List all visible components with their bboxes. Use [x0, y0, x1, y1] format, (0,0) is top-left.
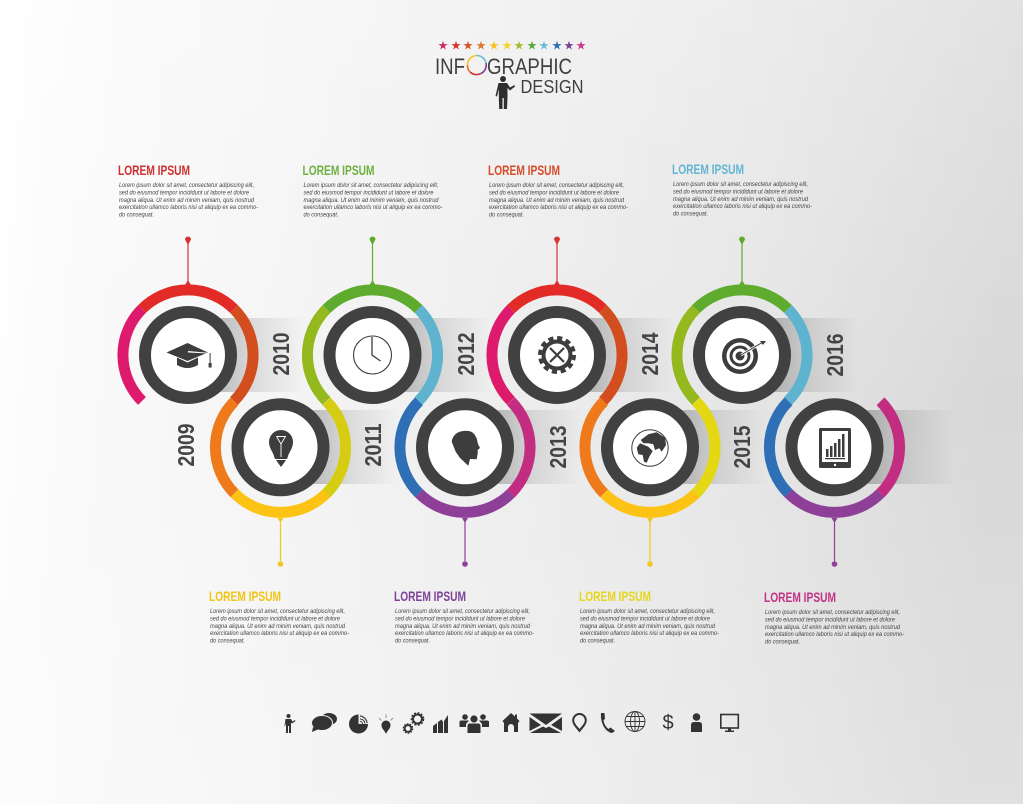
icon: people group — [460, 714, 489, 733]
text block 2: LOREM IPSUM — [302, 162, 374, 178]
text block 7: Lorem ipsum dolor sit amet, consectetur adipiscing elit, — [580, 608, 715, 615]
text block 1 — [118, 162, 258, 218]
rainbow star row: ★ — [502, 38, 512, 52]
text block 6: LOREM IPSUM — [394, 588, 466, 604]
text block 5: sed do eiusmod tempor incididunt ut labore et dolore — [210, 616, 340, 622]
node: graduation cap — [145, 312, 231, 398]
text block 4: LOREM IPSUM — [672, 161, 744, 177]
icon: glowing bulb — [379, 714, 393, 734]
icon: head profile — [452, 431, 480, 466]
text block 7 — [579, 588, 719, 644]
text block 3: sed do eiusmod tempor incididunt ut labore et dolore — [489, 190, 619, 196]
text block 6: exercitation ullamco laboris nisi ut aliquip ex ea commo- — [395, 630, 534, 637]
icon: pie radar — [349, 714, 368, 734]
node: gear — [514, 312, 600, 398]
icon: user — [691, 713, 702, 732]
node: tablet chart — [792, 404, 878, 490]
icon: globe — [625, 712, 645, 732]
shadow bands — [215, 318, 957, 484]
text block 3 — [488, 162, 628, 218]
text block 1: do consequat. — [119, 212, 154, 218]
text block 2: do consequat. — [304, 212, 338, 218]
icon: envelope — [530, 714, 562, 733]
node: light bulb — [238, 404, 324, 490]
text block 8: sed do eiusmod tempor incididunt ut labore et dolore — [765, 616, 895, 624]
icon: gear — [540, 338, 574, 372]
year 2012: 2012 — [453, 332, 479, 376]
icon: monitor — [721, 714, 738, 732]
text block 3: magna aliqua. Ut enim ad minim veniam, quis nostrud — [489, 197, 624, 204]
icon: presenter — [496, 76, 515, 109]
year 2009: 2009 — [173, 424, 199, 466]
rainbow star row: ★ — [514, 38, 524, 52]
icon: light bulb — [269, 430, 293, 467]
year 2011: 2011 — [360, 423, 386, 466]
pin 2 — [370, 236, 376, 285]
icon: speech bubbles — [312, 713, 337, 732]
rainbow star row — [438, 38, 586, 52]
bottom icon row — [284, 712, 738, 734]
rainbow star row: ★ — [564, 38, 574, 52]
rainbow star row: ★ — [576, 38, 586, 52]
rainbow star row: ★ — [552, 38, 562, 52]
text block 5: magna aliqua. Ut enim ad minim veniam, quis nostrud — [210, 623, 345, 630]
text block 2: sed do eiusmod tempor incididunt ut labore et dolore — [304, 190, 434, 196]
text block 8: Lorem ipsum dolor sit amet, consectetur adipiscing elit, — [765, 609, 900, 616]
year 2013: 2013 — [545, 426, 571, 468]
text block 1: LOREM IPSUM — [118, 162, 190, 178]
pin 6 — [462, 518, 468, 567]
text block 6: magna aliqua. Ut enim ad minim veniam, quis nostrud — [395, 623, 530, 630]
node: clock — [330, 312, 416, 398]
text block 1: exercitation ullamco laboris nisi ut aliquip ex ea commo- — [119, 204, 258, 211]
ribbon timeline — [123, 290, 900, 512]
icon: target — [722, 338, 766, 374]
node: head — [422, 404, 508, 490]
text block 6: do consequat. — [395, 638, 430, 644]
year 2014: 2014 — [637, 332, 663, 376]
text block 8: do consequat. — [765, 638, 800, 646]
pin 3 — [554, 236, 560, 285]
pin 4 — [739, 236, 745, 285]
icon: map pin — [572, 713, 587, 732]
text block 7: do consequat. — [580, 638, 615, 644]
text block 2 — [302, 162, 442, 218]
text block 6: Lorem ipsum dolor sit amet, consectetur adipiscing elit, — [395, 608, 530, 615]
segment upper loop 4 — [677, 290, 807, 401]
text block 2: Lorem ipsum dolor sit amet, consectetur adipiscing elit, — [304, 182, 439, 189]
rainbow star row: ★ — [476, 38, 486, 52]
text block 3: exercitation ullamco laboris nisi ut aliquip ex ea commo- — [489, 204, 628, 211]
text block 8: exercitation ullamco laboris nisi ut aliquip ex ea commo- — [765, 631, 904, 638]
text block 5 — [209, 588, 349, 644]
text block 7: exercitation ullamco laboris nisi ut aliquip ex ea commo- — [580, 630, 719, 637]
text block 4: Lorem ipsum dolor sit amet, consectetur adipiscing elit, — [673, 181, 808, 188]
pin 1 — [185, 236, 191, 285]
node: target — [699, 312, 785, 398]
title ring letter O — [467, 55, 486, 75]
text block 3: Lorem ipsum dolor sit amet, consectetur adipiscing elit, — [489, 182, 624, 189]
text block 4: exercitation ullamco laboris nisi ut aliquip ex ea commo- — [673, 203, 812, 210]
segment 2009-2010 top loop — [123, 290, 253, 401]
text block 1: sed do eiusmod tempor incididunt ut labore et dolore — [119, 190, 249, 196]
text block 5: LOREM IPSUM — [209, 588, 281, 604]
text block 2: magna aliqua. Ut enim ad minim veniam, quis nostrud — [304, 197, 439, 204]
node: globe — [607, 404, 693, 490]
text block 8: magna aliqua. Ut enim ad minim veniam, quis nostrud — [765, 624, 900, 631]
text block 4: do consequat. — [673, 210, 708, 218]
text block 6: sed do eiusmod tempor incididunt ut labore et dolore — [395, 616, 525, 622]
text block 6 — [394, 588, 534, 644]
icon: house — [502, 713, 520, 732]
icon: tablet chart — [819, 428, 851, 468]
year 2016: 2016 — [822, 334, 848, 376]
rainbow star row: ★ — [438, 38, 448, 52]
title word: DESIGN: DESIGN — [520, 76, 584, 97]
segment upper loop 3 — [492, 290, 622, 401]
title word: INF: INF — [435, 54, 465, 79]
icon: graduation cap — [166, 343, 212, 368]
text block 4: magna aliqua. Ut enim ad minim veniam, quis nostrud — [673, 196, 808, 203]
year 2015: 2015 — [729, 425, 755, 468]
text block 4 — [672, 161, 812, 218]
text block 1: magna aliqua. Ut enim ad minim veniam, quis nostrud — [119, 197, 254, 204]
segment lower loop 3 — [585, 401, 715, 512]
icon: presenter — [284, 714, 296, 733]
pin 8 — [832, 518, 838, 567]
year labels — [173, 332, 848, 468]
icon: growth chart — [433, 715, 448, 733]
rainbow star row: ★ — [489, 38, 499, 52]
text block 8: LOREM IPSUM — [764, 589, 836, 605]
text block 4: sed do eiusmod tempor incididunt ut labore et dolore — [673, 188, 803, 196]
segment lower loop 2 — [400, 401, 530, 512]
icon: phone — [601, 713, 615, 733]
text block 3: do consequat. — [489, 212, 524, 218]
text block 5: exercitation ullamco laboris nisi ut aliquip ex ea commo- — [210, 630, 349, 637]
icon: gears — [403, 713, 424, 733]
text block 5: Lorem ipsum dolor sit amet, consectetur adipiscing elit, — [210, 608, 345, 615]
text block 2: exercitation ullamco laboris nisi ut aliquip ex ea commo- — [304, 204, 442, 211]
rainbow star row: ★ — [463, 38, 473, 52]
text block 7: LOREM IPSUM — [579, 588, 651, 604]
title word: GRAPHIC: GRAPHIC — [487, 54, 572, 79]
pin 7 — [647, 518, 653, 567]
icon: dollar sign: $ — [662, 712, 674, 734]
icon: clock — [354, 336, 392, 374]
text block 8 — [764, 589, 904, 646]
pins — [185, 236, 838, 567]
text block 7: magna aliqua. Ut enim ad minim veniam, quis nostrud — [580, 623, 715, 630]
text block 7: sed do eiusmod tempor incididunt ut labore et dolore — [580, 616, 710, 622]
rainbow star row: ★ — [451, 38, 461, 52]
text block 1: Lorem ipsum dolor sit amet, consectetur adipiscing elit, — [119, 182, 254, 189]
title — [435, 38, 586, 109]
year 2010: 2010 — [268, 332, 294, 376]
rainbow star row: ★ — [539, 38, 549, 52]
icon: globe — [632, 430, 668, 466]
segment upper loop 2 — [307, 290, 438, 401]
text block 5: do consequat. — [210, 638, 245, 644]
segment lower loop 4 — [769, 401, 900, 512]
pin 5 — [278, 518, 284, 567]
text block 3: LOREM IPSUM — [488, 162, 560, 178]
rainbow star row: ★ — [527, 38, 537, 52]
segment lower loop 1 — [215, 401, 346, 512]
